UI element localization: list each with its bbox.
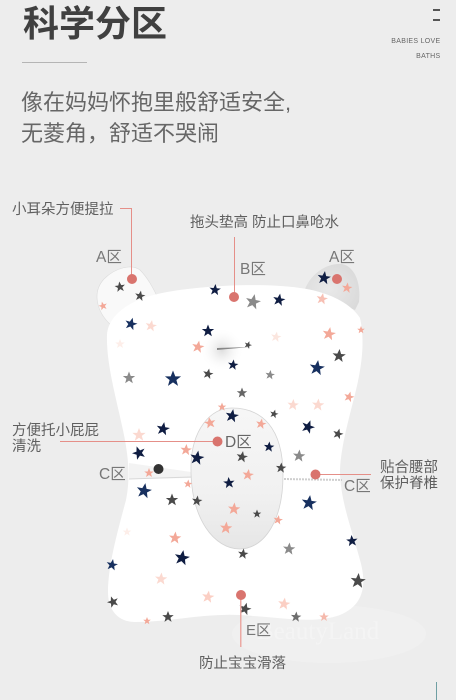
- waist seams: [129, 463, 342, 480]
- watermark: BeautyLand: [257, 618, 380, 645]
- callout: D zone: 方便托小屁屁: [12, 422, 99, 439]
- stars: pale pink: [115, 319, 325, 610]
- illustration: baby bath cushion: [97, 264, 366, 624]
- callout: A zone left: [12, 201, 137, 284]
- callout: A zone right: [329, 249, 355, 284]
- callout: C zone left: C区: [99, 466, 126, 483]
- left ear: [97, 267, 158, 326]
- title: 科学分区: [23, 3, 167, 44]
- callout: E zone: [199, 590, 286, 672]
- callout: B zone: 拖头垫高 防止口鼻呛水: [190, 214, 340, 231]
- callout: D zone: 清洗: [12, 438, 41, 455]
- centre pad (D zone): [191, 408, 283, 549]
- callout: E zone: 防止宝宝滑落: [199, 655, 286, 672]
- title underline: [22, 62, 87, 63]
- brand text: [391, 38, 441, 60]
- callout: B zone: B区: [240, 261, 266, 278]
- callout: A zone right: A区: [329, 249, 355, 266]
- stars: dark grey: [106, 281, 366, 622]
- callout: D zone: [12, 422, 252, 455]
- callout: E zone: E区: [246, 622, 271, 639]
- brand text: BABIES LOVE: [391, 38, 441, 45]
- callout: C zone right: C区: [344, 478, 371, 495]
- callout: A zone left: A区: [96, 249, 122, 266]
- stars: navy: [106, 316, 326, 571]
- callout: A zone left: 小耳朵方便提拉: [12, 201, 114, 218]
- callout: C zone right: 保护脊椎: [380, 475, 438, 492]
- callout: C zone right: 贴合腰部: [380, 459, 438, 476]
- callout: D zone: D区: [225, 434, 252, 451]
- icon: brand mark: [433, 9, 440, 21]
- decorative teal line: [436, 682, 437, 700]
- stars: mid grey: [123, 293, 306, 555]
- watermark: [232, 605, 426, 663]
- brand text: BATHS: [416, 53, 441, 60]
- callout: C zone left: [99, 464, 164, 483]
- subtitle: 无菱角，舒适不哭闹: [21, 121, 219, 146]
- cushion body: [107, 285, 363, 622]
- callout: B zone: [190, 214, 340, 302]
- stars: dark navy: [130, 270, 358, 566]
- subtitle: [21, 90, 291, 146]
- right ear: [304, 264, 359, 310]
- stars: pink: [98, 282, 365, 624]
- callout: C zone right: [310, 459, 438, 495]
- head dent: [200, 328, 244, 372]
- subtitle: 像在妈妈怀抱里般舒适安全,: [21, 90, 291, 115]
